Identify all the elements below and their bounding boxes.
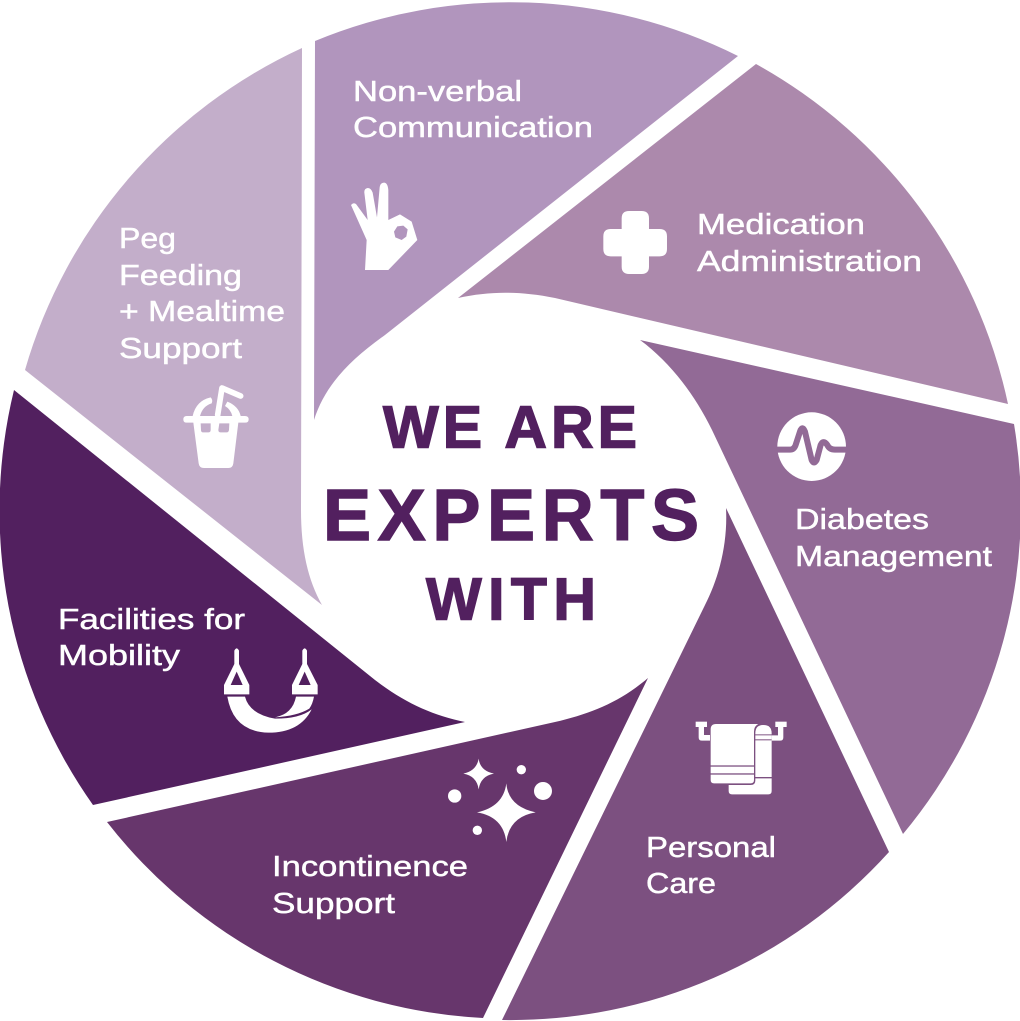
icon: cup with straw: [183, 388, 249, 468]
segment shape: [0, 390, 465, 805]
panel: Non-verbal Communication: [314, 2, 738, 420]
icon: OK hand: [351, 183, 417, 270]
segment shape: [25, 48, 322, 605]
heading: [323, 394, 699, 632]
segment shape: [640, 340, 1020, 834]
icon: sparkles: [448, 759, 552, 842]
label: Care: [646, 868, 716, 900]
label: Mobility: [58, 640, 181, 672]
label: Support: [272, 888, 395, 920]
icon: towel on rail: [696, 722, 787, 794]
segment shape: [502, 508, 889, 1020]
heading line 1: WE ARE: [383, 394, 637, 460]
segment shape: [314, 2, 738, 420]
label: Communication: [353, 112, 593, 144]
icon: heartbeat circle: [775, 412, 848, 481]
label: Facilities for: [58, 604, 245, 636]
label: Incontinence: [272, 851, 468, 883]
panel: Facilities for Mobility: [0, 390, 465, 805]
label: Non-verbal: [353, 76, 522, 108]
label: Diabetes: [795, 504, 929, 536]
panel: Peg Feeding + Mealtime Support: [25, 48, 322, 605]
panel: Incontinence Support: [107, 678, 648, 1018]
panel: Diabetes Management: [640, 340, 1020, 834]
segment shape: [458, 64, 1008, 404]
panel: Medication Administration: [458, 64, 1008, 404]
label: Medication: [697, 209, 865, 241]
label: Peg: [119, 223, 176, 255]
label: Support: [119, 333, 242, 365]
label: Personal: [646, 832, 776, 864]
panel: Personal Care: [502, 508, 889, 1020]
heading line 2: EXPERTS: [323, 476, 699, 556]
label: Management: [795, 541, 992, 573]
icon: hoist swing: [224, 648, 318, 733]
icon: medical cross: [603, 211, 667, 274]
label: + Mealtime: [119, 296, 285, 328]
label: Administration: [697, 246, 922, 278]
segment shape: [107, 678, 648, 1018]
label: Feeding: [119, 260, 242, 292]
heading line 3: WITH: [426, 566, 596, 632]
